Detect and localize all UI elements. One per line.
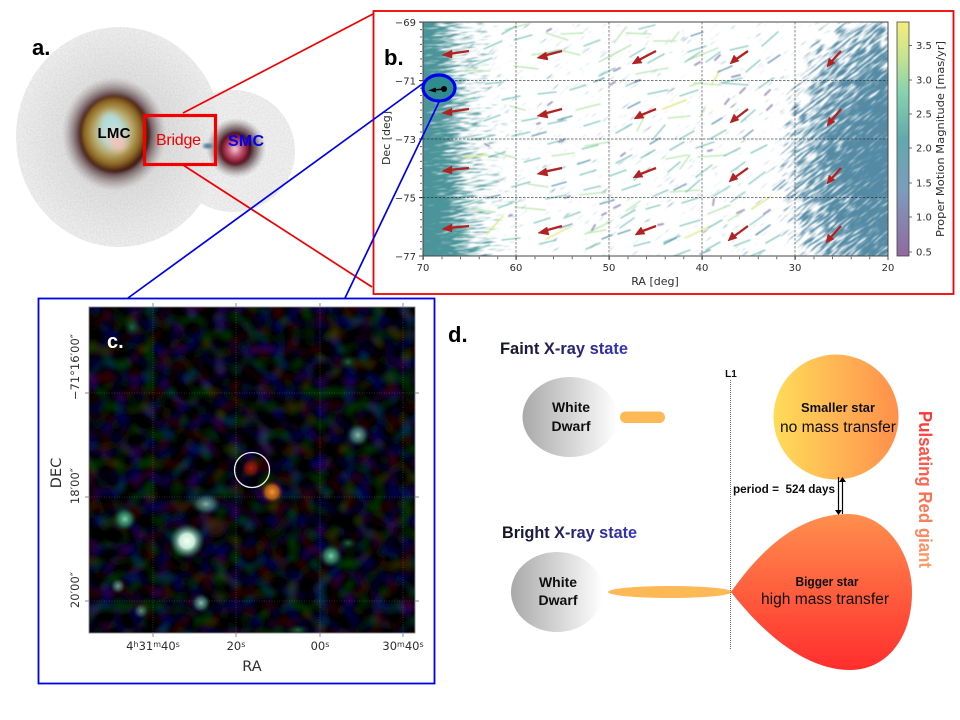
RA tick labels: s bbox=[325, 640, 329, 649]
RA tick labels: s bbox=[176, 640, 180, 649]
white dwarf, bright state: White bbox=[539, 575, 578, 590]
x axis title: RA [deg] bbox=[631, 275, 679, 288]
dense right arrows bbox=[435, 22, 888, 256]
colorbar: 3.0 bbox=[916, 76, 932, 86]
heading: bright state: Bright X-ray state bbox=[502, 524, 637, 542]
red target star bbox=[242, 458, 260, 478]
accretion stream, bright state bbox=[608, 586, 732, 598]
RA tick labels: m bbox=[153, 640, 161, 649]
x tick labels: 60 bbox=[510, 263, 522, 274]
RA tick labels: 31 bbox=[139, 639, 153, 653]
panel b: proper motion map bbox=[374, 0, 960, 651]
RA tick labels: 40 bbox=[161, 639, 176, 653]
y tick labels: −75 bbox=[395, 194, 416, 204]
period label: period = 524 days bbox=[733, 484, 835, 496]
white dwarf, faint state bbox=[522, 377, 618, 457]
panel d: binary system schematic bbox=[448, 322, 935, 670]
x tick labels: 50 bbox=[603, 263, 615, 274]
colorbar: 3.5 bbox=[916, 41, 932, 52]
Dec tick labels: 20′00″ bbox=[68, 571, 82, 608]
RA tick labels: m bbox=[397, 640, 405, 649]
RA tick labels: 00 bbox=[311, 639, 325, 653]
target circle bbox=[234, 452, 270, 488]
source marker with proper motion arrow bbox=[423, 75, 455, 101]
colorbar: 2.0 bbox=[916, 144, 932, 154]
RA tick labels: 40 bbox=[405, 639, 419, 653]
bigger star: Bigger star bbox=[796, 575, 859, 589]
label Bridge: Bridge bbox=[156, 132, 201, 149]
white dwarf, faint state: Dwarf bbox=[552, 419, 591, 434]
Dec tick labels: 18′00″ bbox=[68, 467, 82, 504]
plot b axes bbox=[419, 22, 888, 260]
bigger star bbox=[731, 514, 912, 670]
plot b grid bbox=[423, 22, 888, 256]
colorbar: 0.5 bbox=[916, 248, 932, 258]
label SMC: SMC bbox=[228, 133, 264, 150]
white dwarf, faint state: White bbox=[552, 400, 591, 415]
panel c: sky image cutout bbox=[38, 298, 434, 684]
RA tick labels bbox=[126, 639, 424, 653]
x tick labels: 30 bbox=[789, 263, 801, 274]
RA tick labels: 30 bbox=[382, 639, 397, 653]
colorbar bbox=[897, 22, 932, 258]
label LMC: LMC bbox=[98, 125, 131, 142]
vertical title: pulsating red giant: Pulsating Red giant bbox=[915, 411, 935, 568]
red mean-motion arrows bbox=[442, 50, 841, 243]
y tick labels: −69 bbox=[395, 18, 416, 29]
x tick labels bbox=[417, 263, 894, 274]
panel c frame bbox=[38, 298, 434, 684]
label a.: a. bbox=[32, 35, 50, 60]
label d.: d. bbox=[448, 322, 468, 347]
Dec tick labels: −71°16′00″ bbox=[68, 333, 82, 400]
L1 label: L1 bbox=[725, 369, 737, 380]
multi-band image bbox=[89, 307, 415, 636]
period arrows bbox=[835, 477, 846, 515]
RA tick labels: s bbox=[241, 640, 245, 649]
scattered arrows bbox=[450, 24, 785, 256]
bigger star: high mass transfer bbox=[761, 591, 889, 608]
accretion blob, faint state bbox=[620, 412, 665, 423]
orange neighbouring star bbox=[260, 480, 284, 504]
y tick labels bbox=[395, 18, 416, 263]
smaller star: Smaller star bbox=[801, 401, 875, 415]
x tick labels: 20 bbox=[882, 263, 894, 274]
white dwarf, bright state bbox=[511, 552, 603, 632]
L1 dotted line bbox=[730, 380, 732, 650]
coordinate grid bbox=[89, 307, 415, 633]
image ticks bbox=[85, 303, 419, 637]
y tick labels: −73 bbox=[395, 135, 416, 146]
x tick labels: 40 bbox=[696, 263, 708, 274]
SMC grey disc bbox=[171, 90, 295, 212]
red connector lines from bridge box to panel b bbox=[183, 14, 373, 287]
dense left arrows bbox=[424, 22, 544, 256]
white dwarf, bright state: Dwarf bbox=[538, 593, 578, 608]
RA tick labels: 4 bbox=[126, 639, 134, 653]
smaller star: no mass transfer bbox=[780, 419, 896, 436]
RA axis title: RA bbox=[242, 659, 262, 675]
colorbar title: Proper Motion Magnitude [mas/yr] bbox=[934, 41, 947, 237]
RA tick labels: 20 bbox=[227, 639, 241, 653]
panel b frame bbox=[374, 11, 954, 294]
DEC axis title: DEC bbox=[49, 458, 65, 488]
y tick labels: −71 bbox=[395, 76, 416, 88]
quiver field bbox=[424, 22, 888, 256]
LMC core bbox=[62, 77, 166, 191]
RA tick labels: h bbox=[134, 640, 139, 649]
y axis title: Dec [deg] bbox=[380, 111, 393, 165]
smaller star bbox=[774, 354, 898, 480]
label c.: c. bbox=[107, 331, 124, 353]
panel a: LMC and SMC sky map bbox=[16, 27, 295, 247]
blue connector lines from marker to panel c bbox=[128, 82, 439, 298]
Dec tick labels bbox=[68, 333, 82, 608]
LMC grey disc bbox=[16, 27, 222, 247]
heading: faint state: Faint X-ray state bbox=[500, 340, 628, 358]
RA tick labels: s bbox=[419, 640, 424, 649]
y tick labels: −77 bbox=[395, 252, 416, 263]
label b.: b. bbox=[384, 45, 404, 70]
colorbar: 1.5 bbox=[916, 178, 932, 190]
SMC core bbox=[203, 118, 266, 178]
colorbar: 1.0 bbox=[916, 212, 932, 224]
bridge selection box bbox=[144, 116, 216, 164]
x tick labels: 70 bbox=[417, 263, 429, 274]
colorbar: 2.5 bbox=[916, 110, 932, 120]
